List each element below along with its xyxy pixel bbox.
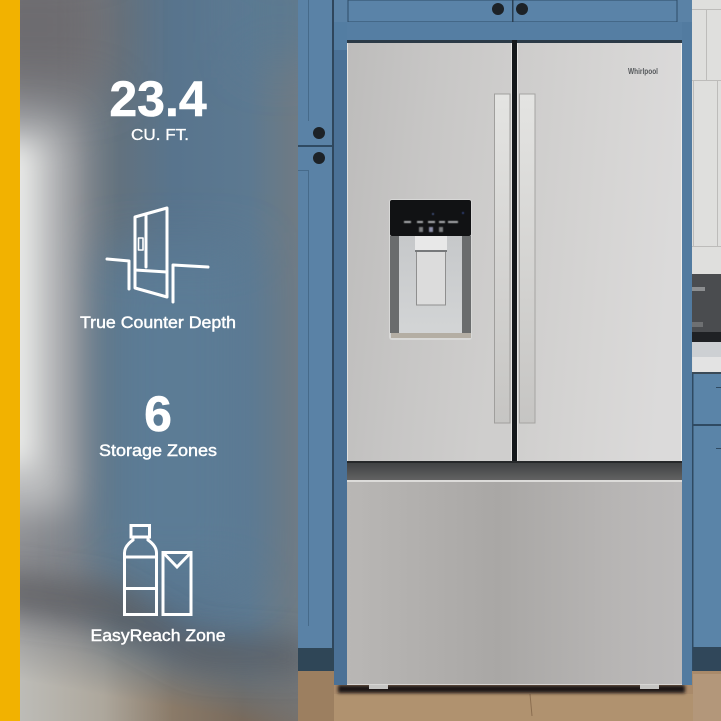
cabinet knobs: [313, 3, 528, 164]
water and ice dispenser: [389, 199, 472, 340]
right wall, toaster and counter: [692, 0, 721, 674]
right door: [517, 43, 682, 462]
stat: capacity: 23.4: [109, 71, 207, 127]
cabinet pillars beside fridge: [334, 22, 692, 685]
stat: storage zones: Storage Zones: [99, 441, 217, 460]
label: true counter depth: True Counter Depth: [80, 313, 236, 332]
wood floor: [298, 671, 721, 721]
label: easyreach zone: EasyReach Zone: [90, 626, 226, 645]
stat: capacity: CU. FT.: [131, 127, 189, 144]
refrigerator: [347, 40, 682, 689]
door handles: [494, 94, 535, 423]
stat: storage zones: [99, 386, 217, 460]
brand logo: Whirlpool: [628, 67, 658, 76]
frosted left panel background: [20, 0, 298, 721]
stat: storage zones: 6: [144, 386, 172, 442]
icon: bottle and carton: [124, 526, 191, 614]
center hinge gap: [347, 462, 682, 480]
left door: [347, 43, 512, 462]
yellow side bar: [0, 0, 20, 721]
dispenser controls: [404, 212, 464, 232]
dispenser paddle: [415, 236, 447, 305]
icon: counter depth fridge: [107, 208, 208, 302]
feet: [369, 685, 659, 689]
freezer drawer: [347, 480, 682, 685]
